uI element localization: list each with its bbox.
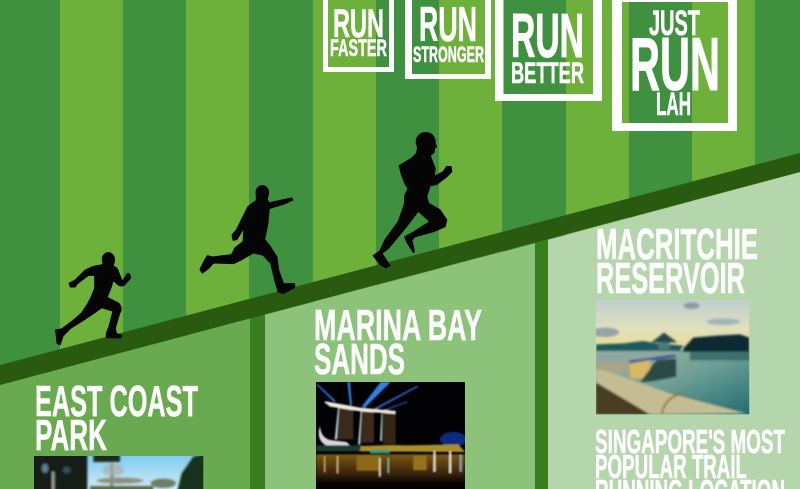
slogan badge: run stronger (405, 0, 491, 79)
slogan badge: run faster: RUN (333, 2, 384, 46)
heading: East Coast Park: EAST COAST (35, 377, 198, 426)
heading: MacRitchie Reservoir (596, 220, 758, 303)
runner silhouette small (56, 253, 130, 344)
panel: MacRitchie Reservoir background (540, 172, 800, 489)
panel: Marina Bay Sands background (260, 242, 540, 489)
slogan badge: run better: RUN (511, 2, 584, 71)
heading: Marina Bay Sands: SANDS (314, 335, 405, 384)
photo: Marina Bay Sands at night (316, 382, 467, 489)
slogan badge: run faster (323, 0, 394, 72)
photo: East Coast Park (34, 456, 204, 489)
heading: Marina Bay Sands (314, 301, 482, 384)
photo: MacRitchie Reservoir pavilion (591, 300, 749, 414)
slogan badge: run better (495, 0, 602, 101)
runner silhouette large (373, 133, 452, 268)
panel divider left (250, 310, 265, 489)
slogan badge: run faster: FASTER (330, 35, 387, 62)
heading: Marina Bay Sands: MARINA BAY (314, 301, 482, 350)
slogan badge: run stronger: STRONGER (413, 42, 484, 67)
panel: East Coast Park background (0, 316, 260, 489)
sloped hill band (0, 153, 800, 385)
slogan badge: run better: BETTER (511, 57, 584, 90)
panel divider right (535, 235, 548, 489)
slogan badge: just run lah: JUST (649, 4, 700, 43)
slogan badge: just run lah: RUN (630, 22, 720, 106)
text block: Singapore's most popular trail running location (595, 423, 785, 489)
heading: East Coast Park: PARK (35, 411, 107, 460)
slogan badge: just run lah: LAH (656, 86, 691, 122)
heading: East Coast Park (35, 377, 198, 460)
runner silhouette medium (200, 186, 294, 293)
slogan badge: just run lah (612, 0, 737, 131)
